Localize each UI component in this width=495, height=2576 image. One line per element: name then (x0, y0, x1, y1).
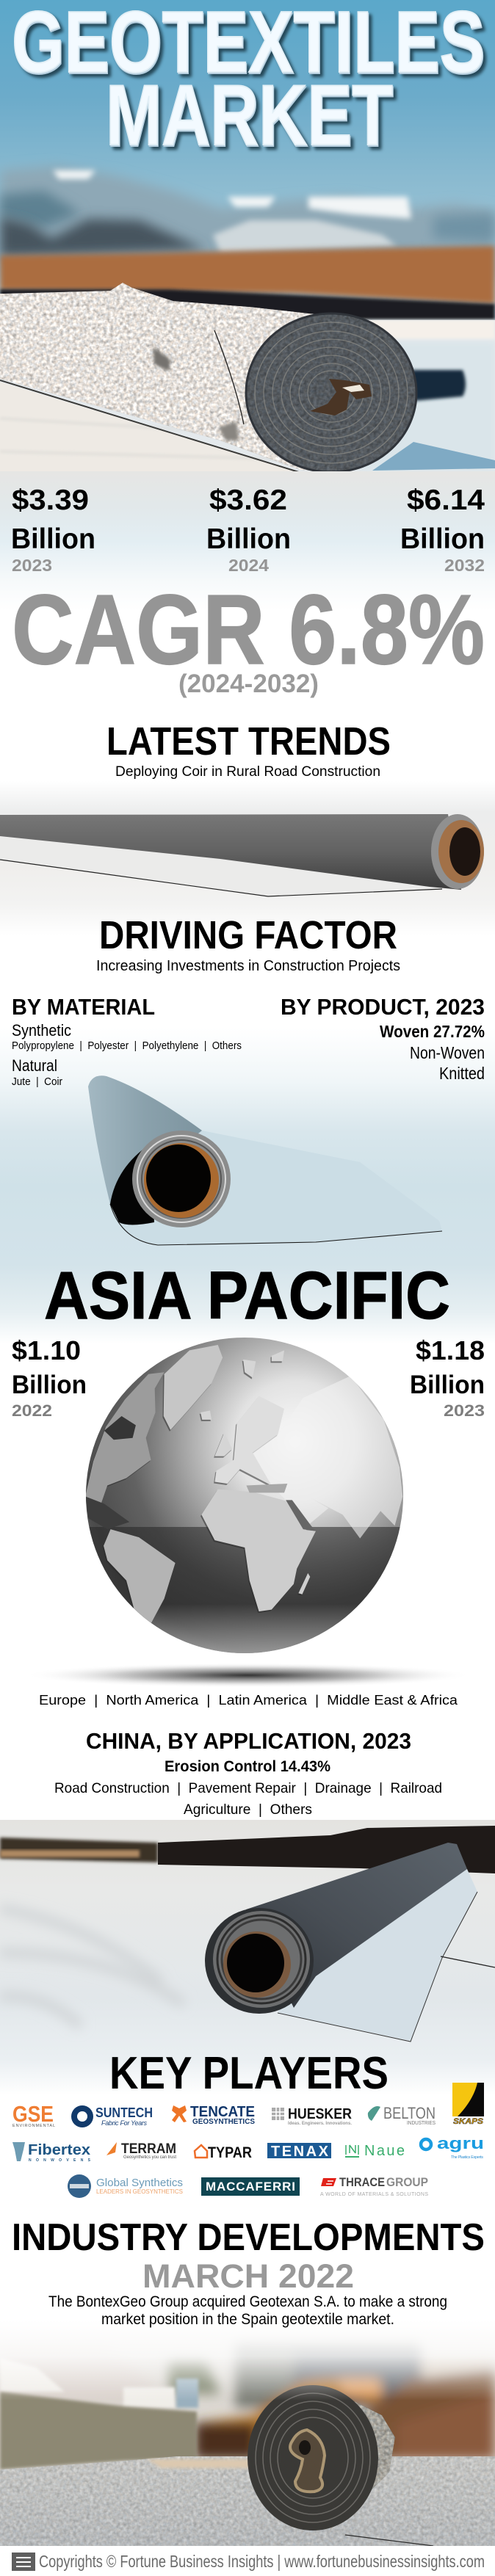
roll body (246, 1843, 467, 2008)
hero photo: geotextile roll on site (0, 0, 495, 477)
latest trends heading: LATEST TRENDS (106, 719, 391, 763)
logo: Typar (195, 2144, 252, 2161)
logo: TenCate: TENCATE (190, 2104, 255, 2120)
photo: grey geotextile roll (0, 781, 495, 935)
logo: Global Synthetics (68, 2174, 183, 2198)
china heading: CHINA, BY APPLICATION, 2023 (86, 1728, 411, 1754)
logo: Naue: Naue (364, 2143, 405, 2159)
logo: Skaps (452, 2083, 484, 2126)
market size 2024: Billion (206, 523, 291, 555)
africa (201, 1489, 316, 1611)
asia (253, 1376, 402, 1539)
china segment: Erosion Control 14.43% (165, 1758, 330, 1775)
logo: TenCate: GEOSYNTHETICS (192, 2118, 255, 2126)
by material block: BY MATERIAL (12, 994, 155, 1020)
logo: Maccaferri: MACCAFERRI (206, 2180, 295, 2194)
photo: dark roll on white sheet (0, 1820, 495, 2095)
roll end (132, 1131, 231, 1227)
logo: Huesker (272, 2106, 352, 2126)
greenland (164, 1345, 223, 1430)
logo: Thrace Group: THRACE (339, 2175, 385, 2189)
market size 2023: Billion (11, 523, 95, 555)
logo: Typar: TYPAR (208, 2144, 252, 2161)
logo: Suntech: Fabric For Years (101, 2119, 147, 2127)
key players heading: KEY PLAYERS (109, 2048, 389, 2099)
by product block: Knitted (439, 1064, 485, 1083)
market size 2023: $3.39 (12, 485, 89, 516)
title (12, 0, 485, 163)
development text: market position in the Spain geotextile market. (101, 2311, 394, 2328)
logo: Agru: The Plastics Experts (451, 2155, 483, 2160)
china segments list (54, 1780, 442, 1818)
logo: Belton: INDUSTRIES (407, 2121, 436, 2126)
by product block (281, 994, 485, 1083)
region value 2023: $1.18 (416, 1335, 485, 1365)
logo: Naue (345, 2143, 405, 2159)
logo: Agru: agru (437, 2134, 484, 2152)
china segments list: Agriculture | Others (184, 1802, 312, 1818)
logo: Huesker: HUESKER (288, 2106, 352, 2122)
logo: Global Synthetics: Global Synthetics (96, 2177, 183, 2189)
logo: Global Synthetics: LEADERS IN GEOSYNTHETICS (96, 2188, 183, 2195)
footer logo (12, 2553, 35, 2571)
retaining wall (0, 2392, 197, 2470)
dark roll behind (411, 370, 466, 401)
logo: Fibertex: NONWOVENS (29, 2158, 91, 2163)
south america (104, 1529, 176, 1624)
by material block (12, 994, 242, 1088)
blue shadow (372, 442, 495, 471)
logo: Maccaferri (201, 2177, 300, 2196)
development date: MARCH 2022 (142, 2257, 354, 2295)
region value 2022 (12, 1335, 87, 1420)
logo: Belton (368, 2104, 436, 2126)
sheet (110, 1131, 442, 1245)
roll body (88, 1075, 202, 1204)
logo: Suntech: SUNTECH (95, 2105, 153, 2120)
logo: Terram: TERRAM (121, 2141, 176, 2157)
development text: The BontexGeo Group acquired Geotexan S.A. to make a strong (48, 2293, 447, 2310)
logo: Terram: Geosynthetics you can trust (123, 2155, 176, 2160)
north america land (85, 1372, 165, 1503)
latest trends text: Deploying Coir in Rural Road Construction (115, 764, 380, 780)
logo: Thrace Group: A WORLD OF MATERIALS & SOLUTIONS (320, 2192, 428, 2197)
roll end disc (246, 313, 416, 472)
china segments list: Road Construction | Pavement Repair | Drainage | Railroad (54, 1780, 442, 1796)
by material block: Jute | Coir (12, 1076, 62, 1088)
by product block: Woven 27.72% (380, 1022, 485, 1041)
roll end (205, 1908, 314, 2014)
gravel ground (0, 2456, 495, 2546)
europe (214, 1396, 284, 1485)
logo: GSE: ENVIRONMENTAL (12, 2124, 55, 2128)
photo: opened roll on pale sheet (0, 1028, 495, 1343)
roll body (323, 2386, 395, 2530)
logo: Thrace Group (320, 2175, 428, 2197)
market size 2032: 2032 (444, 556, 485, 575)
logo: TenCate (172, 2104, 255, 2126)
globe shadow (24, 1663, 472, 1688)
driving factor text: Increasing Investments in Construction Projects (96, 958, 400, 974)
region value 2022: $1.10 (12, 1335, 81, 1365)
logo: Thrace Group: GROUP (386, 2175, 428, 2189)
region value 2023: 2023 (444, 1401, 485, 1420)
market size 2023 (11, 485, 95, 575)
region value 2023: Billion (410, 1371, 485, 1399)
market size 2024 (206, 485, 291, 575)
region value 2022: 2022 (12, 1401, 52, 1420)
by material block: Polypropylene | Polyester | Polyethylene | Others (12, 1040, 242, 1052)
by material block: Synthetic (12, 1021, 71, 1040)
logo: Fibertex (12, 2142, 91, 2163)
market size 2024: 2024 (228, 556, 269, 575)
driving factor heading: DRIVING FACTOR (99, 913, 397, 957)
roll end (248, 2385, 378, 2530)
other regions: Europe | North America | Latin America | Middle East & Africa (39, 1692, 458, 1708)
CAGR period: (2024-2032) (178, 670, 319, 698)
logo: Agru (421, 2134, 484, 2160)
sheet (278, 1869, 477, 2041)
logo: Huesker: Ideas. Engineers. Innovations. (288, 2122, 352, 2126)
roll body (0, 283, 331, 473)
construction site photo with roll (0, 2320, 495, 2546)
by material block: Natural (12, 1056, 57, 1075)
region value 2022: Billion (12, 1371, 87, 1399)
region value 2023 (410, 1335, 485, 1420)
logo: Fibertex: Fibertex (28, 2142, 90, 2158)
logo: Belton: BELTON (383, 2104, 436, 2122)
market size 2024: $3.62 (209, 485, 287, 516)
market size 2032: $6.14 (407, 485, 485, 516)
globe (73, 1338, 411, 1655)
by product block: BY PRODUCT, 2023 (281, 994, 485, 1020)
logo: Tenax: TENAX (271, 2144, 329, 2160)
logo: Suntech (71, 2105, 153, 2127)
region heading: ASIA PACIFIC (44, 1258, 450, 1333)
logo: Skaps: SKAPS (453, 2117, 484, 2126)
market size 2023: 2023 (12, 556, 52, 575)
market size 2032 (400, 485, 485, 575)
market size 2032: Billion (400, 523, 485, 555)
logo: Terram (106, 2141, 176, 2160)
title: MARKET (106, 67, 393, 163)
logo: GSE: GSE (12, 2101, 54, 2127)
pale ground fading below hero (0, 471, 495, 611)
development text (48, 2293, 447, 2328)
